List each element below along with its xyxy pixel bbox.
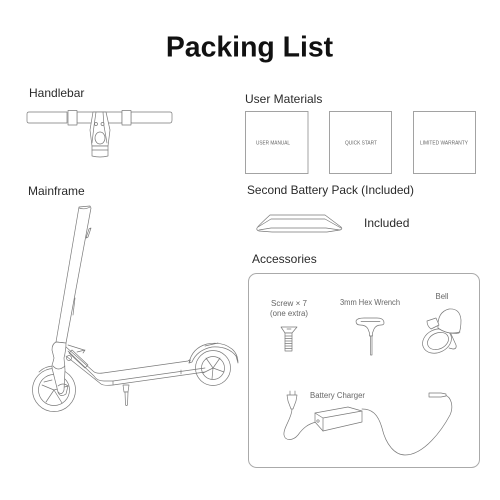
stem	[56, 206, 91, 343]
icon: hex wrench	[356, 318, 384, 355]
heading: mainframe: Mainframe	[28, 184, 85, 198]
card: limited warranty	[414, 112, 476, 174]
front fork	[52, 342, 68, 396]
icon: screw	[281, 327, 297, 351]
card: user manual: USER MANUAL	[256, 140, 290, 146]
deck	[66, 345, 205, 385]
connector	[429, 393, 446, 397]
heading: accessories: Accessories	[252, 252, 317, 266]
cord: plug to brick	[284, 409, 316, 440]
cord: brick to connector	[362, 395, 452, 455]
plug	[287, 391, 297, 409]
rear wheel	[189, 343, 238, 386]
card: user manual	[246, 112, 308, 174]
label: included: Included	[364, 216, 409, 230]
brick	[315, 407, 362, 431]
icon: handlebar	[27, 110, 172, 157]
card: quick start	[330, 112, 392, 174]
icon: battery charger	[284, 391, 452, 455]
title: Packing List	[166, 32, 334, 64]
label: hex wrench: 3mm Hex Wrench	[340, 298, 400, 307]
heading: user materials: User Materials	[245, 92, 322, 106]
label: battery charger: Battery Charger	[310, 391, 365, 400]
label: screw: Screw × 7	[271, 299, 308, 308]
icon: bell	[419, 309, 461, 358]
front wheel	[32, 366, 76, 412]
icon: scooter mainframe	[32, 206, 238, 412]
card: quick start: QUICK START	[345, 140, 378, 146]
label: bell: Bell	[436, 292, 449, 301]
panel: accessories	[248, 274, 480, 468]
heading: second battery pack: Second Battery Pack (Included)	[247, 183, 414, 197]
icon: battery pack	[257, 215, 342, 232]
card: limited warranty: LIMITED WARRANTY	[420, 140, 468, 146]
kickstand	[123, 385, 129, 406]
label: one extra: (one extra)	[270, 309, 308, 318]
heading: handlebar: Handlebar	[29, 86, 84, 100]
